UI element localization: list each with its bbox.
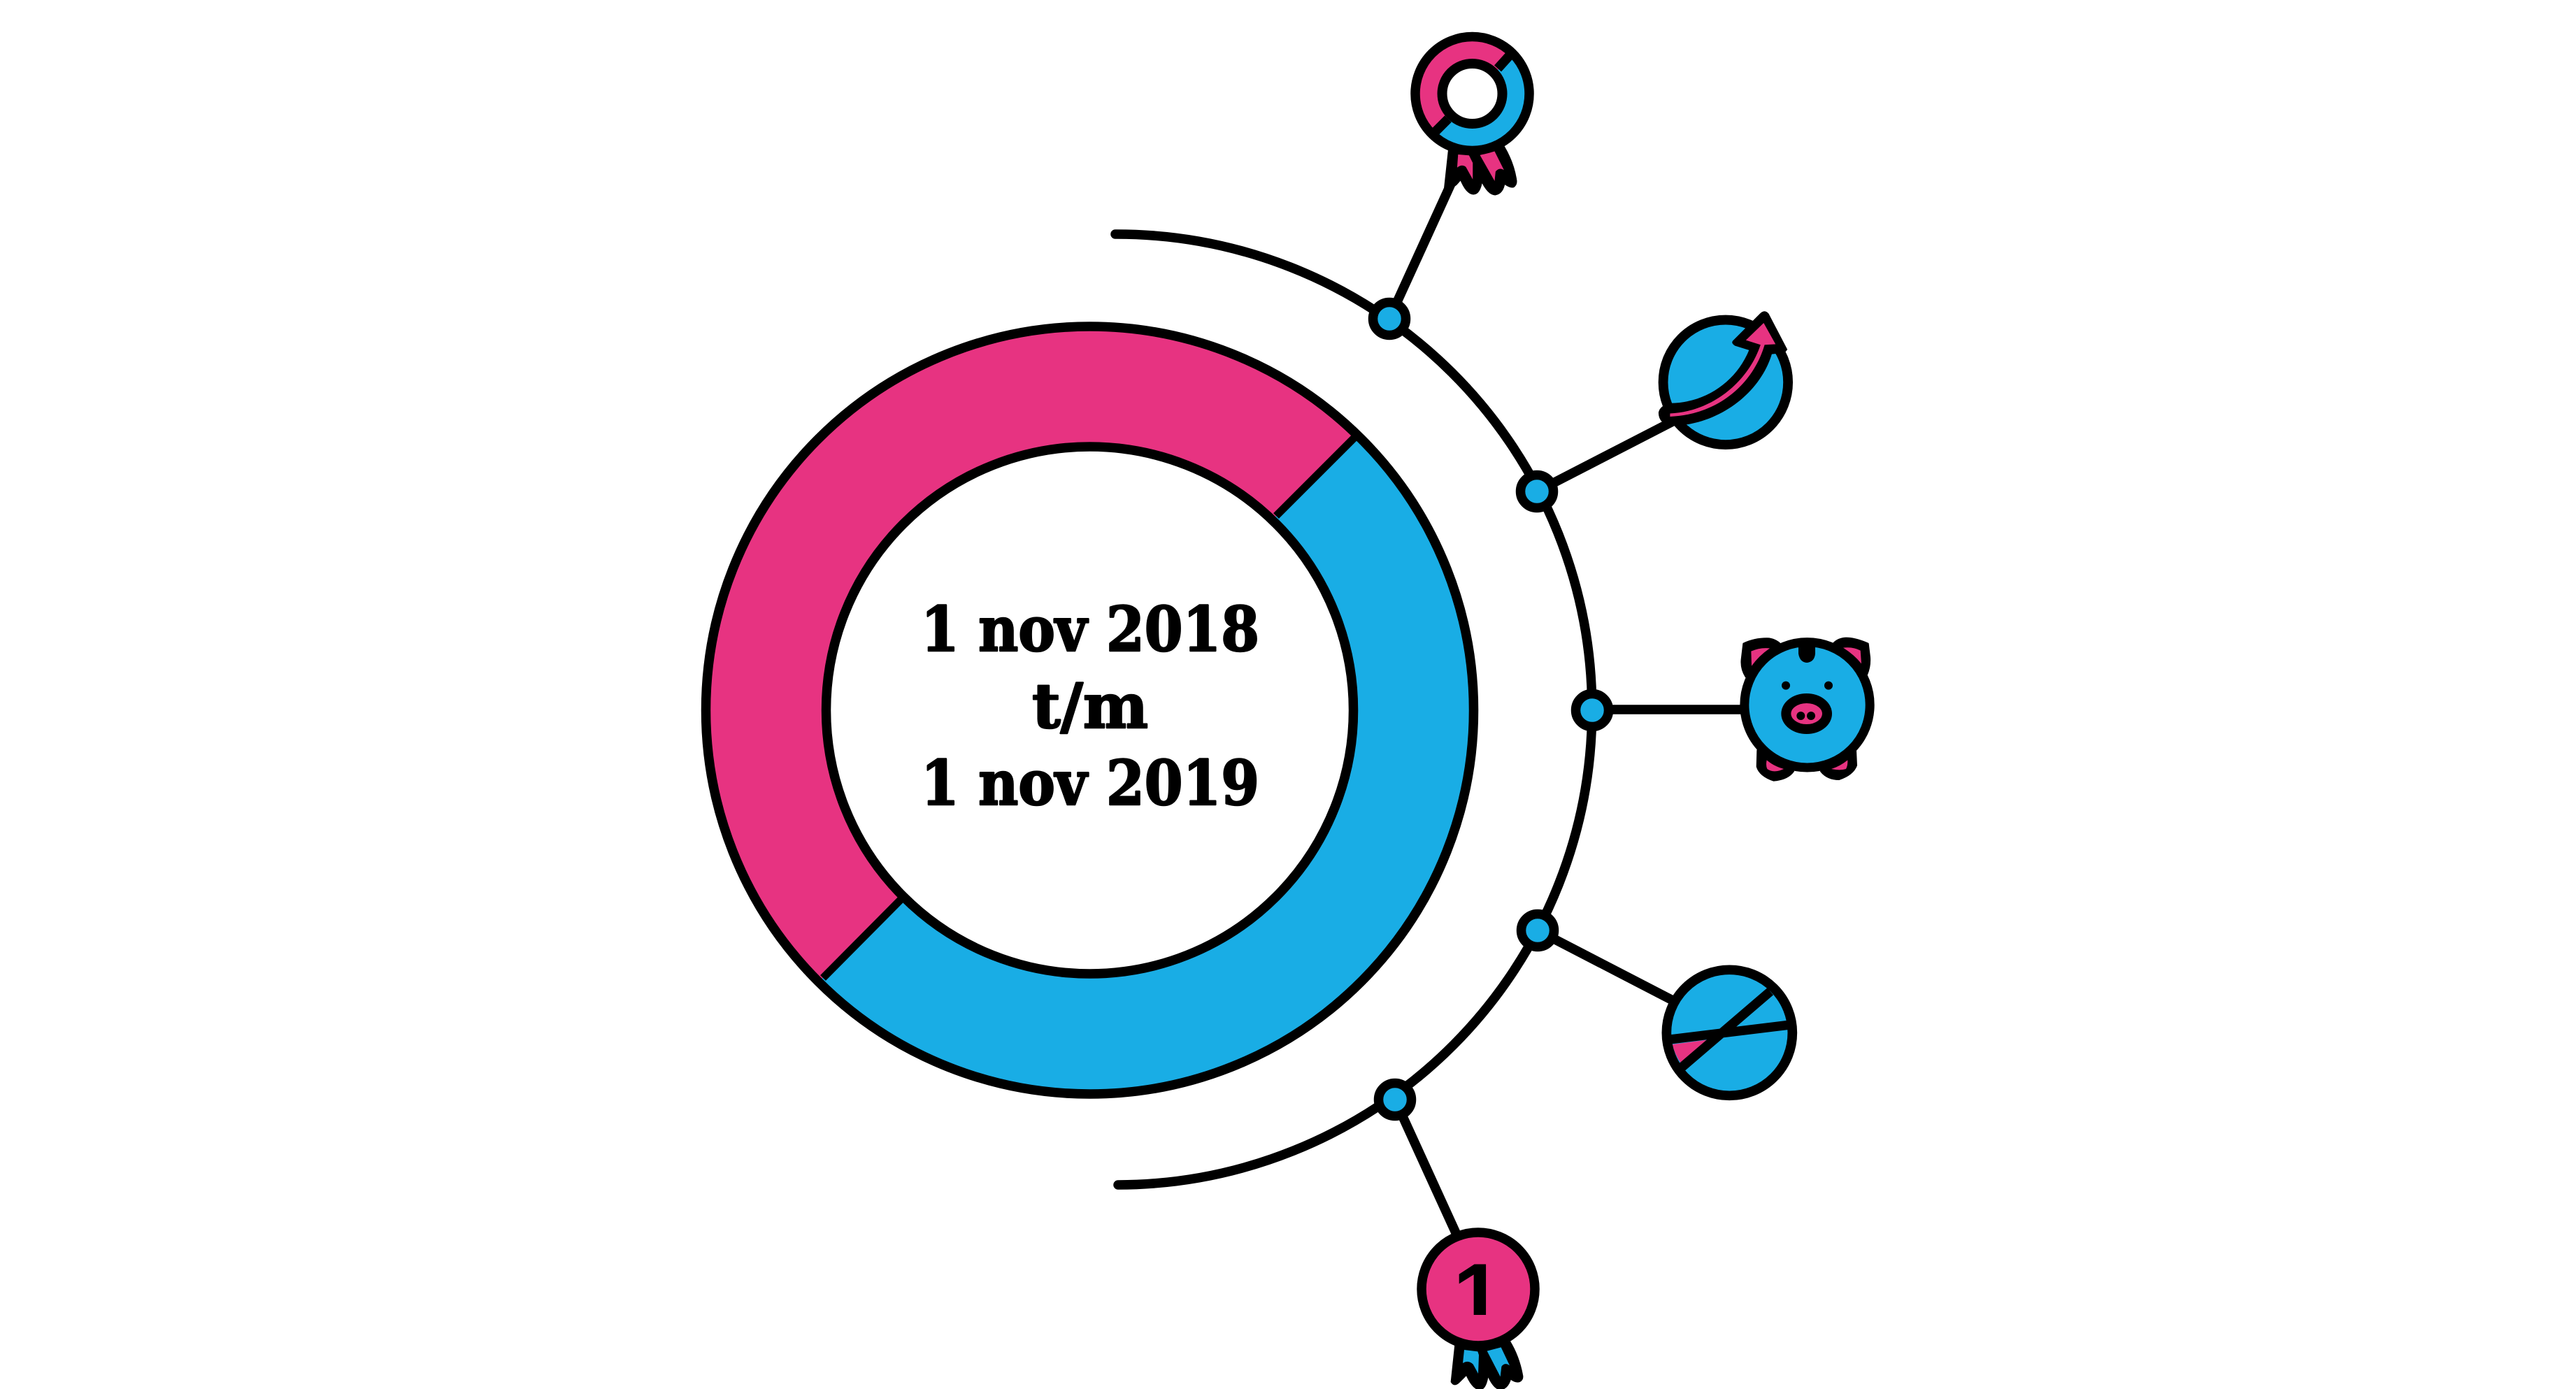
medal ribbons (1452, 1341, 1522, 1389)
icon: growth arrow globe (1659, 311, 1788, 445)
date range text: t/m (1032, 670, 1148, 742)
icon: number one medal (1422, 1232, 1535, 1389)
medal disc (1422, 1232, 1535, 1346)
pig body (1745, 642, 1870, 768)
icon: piggy bank (1741, 638, 1870, 781)
timeline arc (1115, 234, 1592, 1185)
icon: crossed-out slices circle (1666, 970, 1792, 1095)
pig ears (1741, 638, 1870, 677)
timeline nodes (1373, 302, 1608, 1116)
medal number: 1 (1453, 1245, 1503, 1344)
date range text (921, 593, 1259, 819)
medal rosette (1415, 36, 1529, 151)
donut chart (701, 322, 1478, 1099)
coin slot (1798, 643, 1815, 663)
connector lines (1389, 184, 1745, 1236)
medal ribbons (1445, 147, 1516, 194)
date range text: 1 nov 2018 (921, 593, 1259, 665)
icon: split rosette medal (1415, 36, 1529, 194)
pig feet (1757, 748, 1856, 781)
date range text: 1 nov 2019 (921, 747, 1259, 819)
pig face (1782, 682, 1833, 729)
